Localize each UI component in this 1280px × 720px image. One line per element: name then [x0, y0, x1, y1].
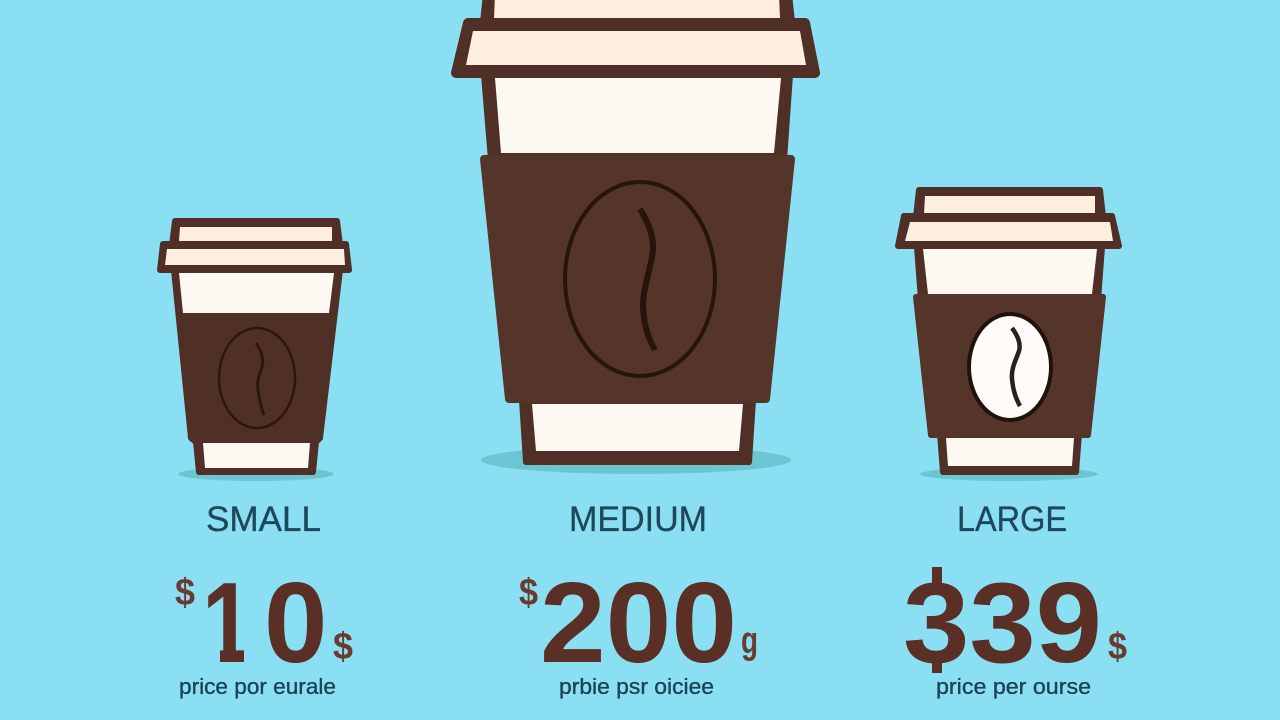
cup base	[522, 400, 753, 462]
sleeve	[916, 297, 1103, 435]
medium cup	[456, 0, 815, 474]
price	[198, 559, 327, 687]
lower paper band	[203, 443, 310, 468]
lid top tier	[172, 221, 340, 245]
cup shadow	[481, 446, 791, 474]
cup body upper	[917, 247, 1102, 300]
size label: LARGE	[957, 500, 1067, 539]
price: 1	[202, 559, 253, 686]
large cup	[898, 190, 1119, 481]
lid top tier	[483, 0, 792, 22]
caption: prbie psr oiciee	[559, 674, 714, 699]
small column	[175, 500, 353, 699]
lid top tier	[916, 190, 1103, 217]
upper paper band	[495, 78, 781, 153]
size label: MEDIUM	[569, 500, 707, 539]
caption: price por eurale	[179, 674, 336, 699]
cup shadow	[178, 467, 334, 481]
price: 200	[540, 560, 737, 687]
cup shadow	[920, 467, 1098, 481]
large column	[903, 500, 1127, 699]
upper paper band	[179, 273, 334, 313]
upper paper band	[923, 249, 1097, 294]
dollar stroke above and below first digit	[932, 567, 942, 673]
coffee bean icon	[969, 314, 1051, 420]
caption: price per ourse	[936, 674, 1091, 699]
trailing unit mark: g	[741, 620, 758, 662]
price: 0	[264, 560, 327, 687]
lower paper band	[532, 404, 743, 451]
leading currency mark: $	[519, 572, 538, 614]
trailing currency mark: $	[1108, 626, 1127, 668]
lid rim	[898, 216, 1119, 246]
medium column	[519, 500, 758, 699]
sleeve	[484, 159, 791, 399]
cup body	[174, 270, 340, 472]
cup base	[940, 434, 1079, 472]
small cup	[160, 221, 349, 481]
lower paper band	[946, 438, 1074, 466]
lid rim	[456, 23, 815, 73]
size label: SMALL	[206, 500, 321, 539]
leading currency mark: $	[175, 572, 195, 614]
cup body upper	[484, 75, 790, 160]
trailing currency mark: $	[333, 626, 353, 668]
lid rim	[160, 244, 349, 270]
price: 339	[903, 560, 1102, 687]
coffee bean icon	[565, 182, 715, 376]
coffee bean icon	[219, 328, 295, 428]
